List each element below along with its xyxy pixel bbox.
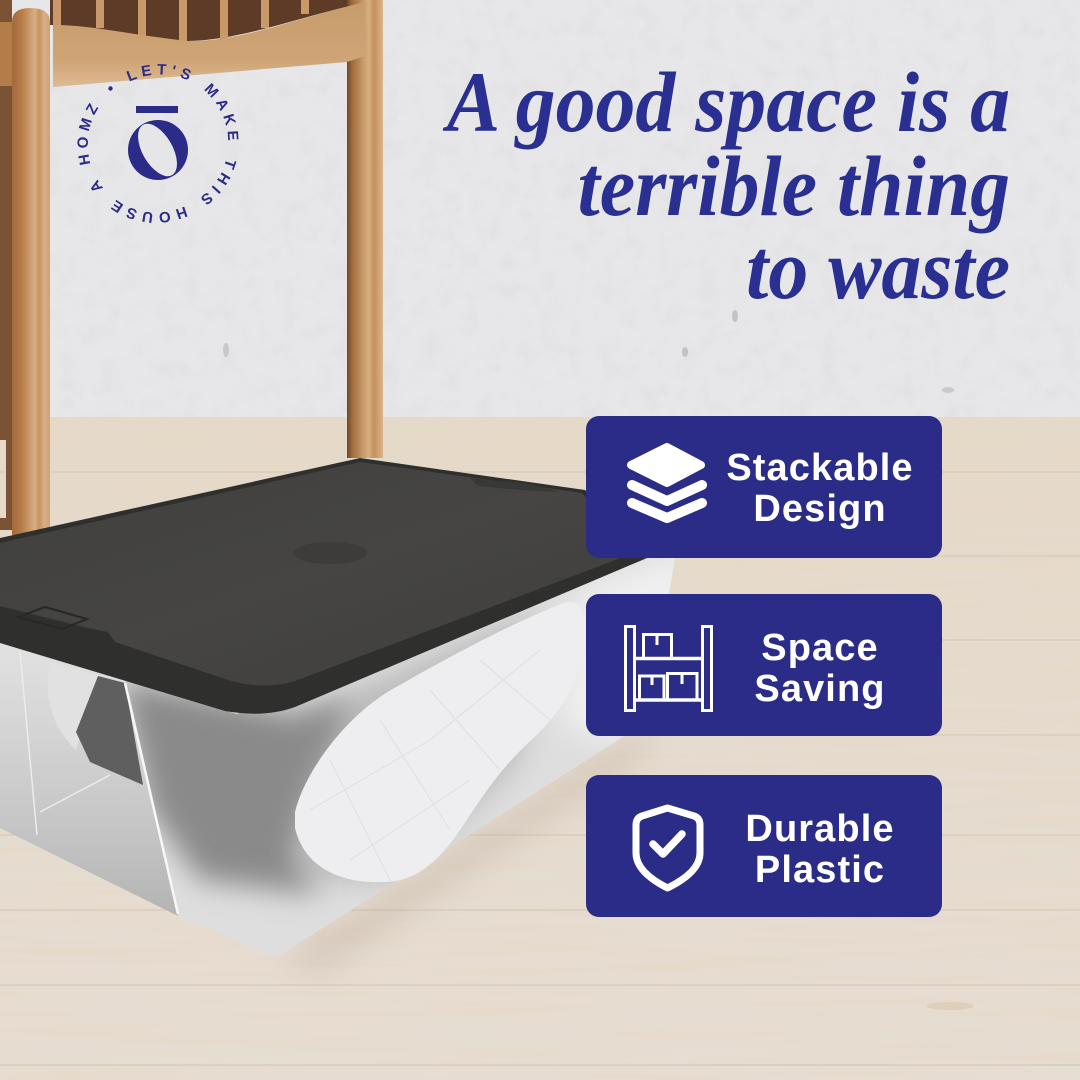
logo: disc — [128, 120, 188, 180]
label: durable plastic: Plastic — [755, 849, 885, 891]
chair: far left rail and leg — [0, 0, 12, 530]
box left face — [0, 678, 178, 916]
box mid shade right — [300, 610, 540, 880]
floor — [0, 417, 1080, 1080]
lid rim — [0, 458, 647, 714]
icon: shelves with boxes — [624, 625, 713, 712]
storage box — [0, 458, 700, 970]
chair: right post — [347, 0, 383, 458]
logo: bar — [136, 106, 178, 113]
chair: back wood behind spindles — [50, 0, 350, 41]
box dark shade front — [120, 680, 350, 895]
badge: stackable design — [586, 416, 942, 558]
chair: left stub rail — [0, 22, 12, 86]
label: space saving: Space — [761, 627, 879, 669]
box bright right end — [562, 558, 675, 740]
label: durable plastic: Durable — [745, 808, 895, 850]
chair: top rail — [53, 2, 365, 87]
title: to waste — [746, 221, 1010, 317]
logo: disc hole — [130, 117, 185, 183]
box left seam — [20, 652, 110, 835]
chair — [0, 0, 383, 535]
lid surface — [0, 462, 634, 686]
sole pattern — [310, 650, 550, 880]
icon: stacked layers — [627, 443, 707, 523]
chair: left post — [12, 8, 50, 535]
label: stackable design: Stackable — [726, 447, 914, 489]
lid label plate — [18, 607, 87, 629]
label: stackable design — [726, 447, 914, 530]
label: space saving: Saving — [754, 668, 886, 710]
lid centre dimple — [293, 542, 367, 564]
badge: space saving — [586, 594, 942, 736]
label: stackable design: Design — [753, 488, 887, 530]
chair: spindles — [57, 0, 305, 41]
shoe sole — [295, 602, 586, 882]
box corner line — [125, 683, 178, 914]
shoe heel — [48, 662, 98, 750]
box body — [0, 558, 675, 957]
label: durable plastic — [745, 808, 895, 891]
title: A good space is a — [447, 54, 1010, 150]
badge: durable plastic — [586, 775, 942, 917]
title — [442, 54, 1010, 317]
label: space saving — [754, 627, 886, 710]
title: terrible thing — [578, 138, 1010, 234]
shoe dark inner — [76, 676, 143, 785]
icon: shield with check — [632, 804, 704, 892]
logo: ring text: LET'S MAKE THIS HOUSE A HOMZ — [77, 64, 238, 223]
box shadow on floor — [280, 738, 660, 975]
logo: ring dot — [108, 86, 113, 91]
logo: circular seal — [77, 64, 238, 223]
wall — [0, 0, 1080, 418]
lid handle — [470, 478, 560, 492]
